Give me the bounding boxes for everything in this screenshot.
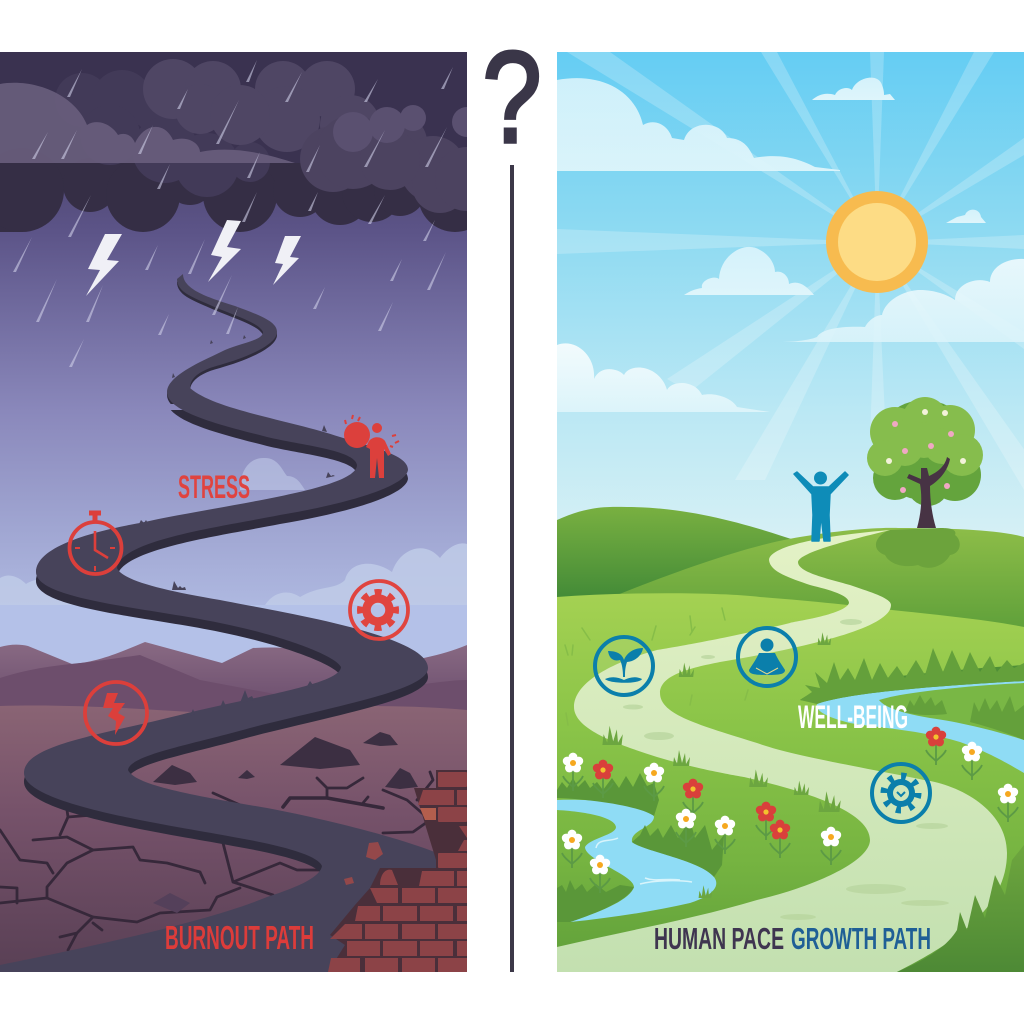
panel: burnout path bbox=[0, 52, 499, 981]
person with raised arms bbox=[794, 472, 848, 541]
sunny sky background bbox=[557, 52, 1024, 539]
label: burnout path: BURNOUT PATH bbox=[165, 919, 314, 956]
path stones bbox=[623, 619, 949, 920]
upper right stream bbox=[800, 648, 1024, 773]
mid ridge bbox=[0, 655, 467, 692]
label: human pace growth path: GROWTH PATH bbox=[791, 921, 931, 956]
distant mountains bbox=[0, 642, 467, 694]
pale distant clouds bbox=[0, 458, 467, 605]
road grass tufts bbox=[138, 335, 335, 716]
winding dark road bbox=[0, 274, 441, 981]
icon: stopwatch bbox=[70, 513, 122, 574]
foreground meadow bbox=[557, 593, 1024, 972]
right hill bbox=[620, 528, 1024, 627]
lower left stream bbox=[557, 773, 724, 922]
label: human pace growth path: HUMAN PACE bbox=[654, 921, 784, 956]
icon: sprout bbox=[595, 637, 653, 695]
sun bbox=[826, 191, 928, 293]
icon: gear bbox=[350, 581, 408, 639]
flowers bbox=[562, 727, 1018, 893]
lightning bolts bbox=[86, 220, 301, 296]
label: well-being: WELL-BEING bbox=[798, 699, 908, 735]
back hill bbox=[557, 507, 800, 600]
horizon haze bbox=[0, 605, 467, 608]
rocks bbox=[153, 732, 418, 913]
brick rubble bbox=[344, 842, 383, 885]
center divider line bbox=[510, 165, 514, 972]
storm clouds bbox=[0, 59, 467, 232]
label: stress: STRESS bbox=[178, 469, 250, 505]
rain streaks bbox=[13, 60, 453, 367]
tree shadow on hill bbox=[876, 528, 960, 568]
cracked ground bbox=[0, 705, 467, 972]
clouds bbox=[557, 78, 1024, 412]
stormy sky background bbox=[0, 191, 467, 605]
sun rays bbox=[557, 52, 1024, 500]
winding light path bbox=[557, 530, 1007, 972]
ground cracks bbox=[0, 772, 463, 950]
grass tufts bbox=[602, 632, 841, 898]
icon: lightning circle bbox=[85, 682, 147, 744]
icon: meditation bbox=[738, 628, 796, 686]
icon: sun with heart bbox=[872, 764, 930, 822]
broken brick wall bbox=[328, 770, 467, 972]
center question mark: ? bbox=[482, 25, 542, 170]
dark corner grass bbox=[897, 845, 1024, 972]
red stressed figure with burden bbox=[344, 415, 399, 478]
tree bbox=[867, 397, 983, 528]
faint meadow blades bbox=[565, 608, 748, 725]
panel: growth path bbox=[557, 52, 1024, 972]
